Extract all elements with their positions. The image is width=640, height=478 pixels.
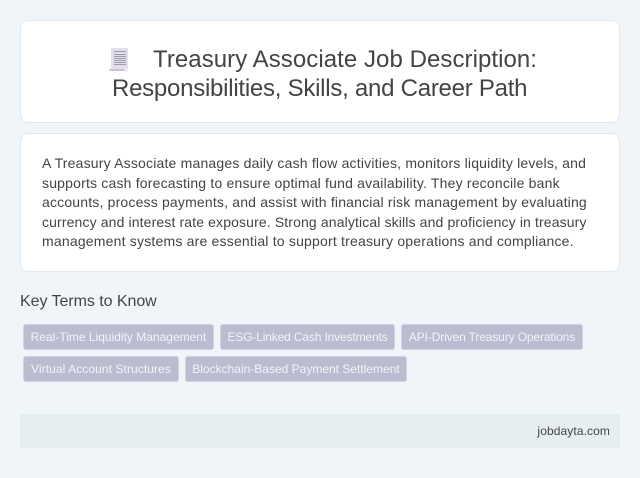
tag: real-time liquidity: Real-Time Liquidity Management bbox=[31, 330, 206, 344]
footer site name: jobdayta.com bbox=[537, 424, 610, 438]
title line 1: Treasury Associate Job Description: bbox=[153, 46, 537, 73]
title line 2: Responsibilities, Skills, and Career Path bbox=[112, 75, 527, 102]
tag: blockchain: Blockchain-Based Payment Settlement bbox=[192, 362, 400, 376]
description line 3: accounts, process payments, and assist with financial risk management by evaluating bbox=[42, 194, 587, 210]
description line 1: A Treasury Associate manages daily cash flow activities, monitors liquidity levels, and bbox=[42, 155, 586, 171]
description line 4: currency and interest rate exposure. Strong analytical skills and proficiency in treasury bbox=[42, 214, 587, 230]
heading: key terms: Key Terms to Know bbox=[20, 293, 157, 310]
footer bar bbox=[20, 414, 620, 448]
tag: virtual account bbox=[23, 356, 179, 382]
icon: receipt scroll bbox=[109, 48, 128, 72]
panel: title card bbox=[20, 20, 620, 123]
tag: blockchain bbox=[185, 356, 407, 382]
tag: ESG cash: ESG-Linked Cash Investments bbox=[227, 330, 388, 344]
tag: ESG cash bbox=[220, 324, 395, 350]
tag: virtual account: Virtual Account Structures bbox=[31, 362, 171, 376]
tag: real-time liquidity bbox=[23, 324, 214, 350]
tag: API treasury bbox=[401, 324, 583, 350]
description line 2: supports cash forecasting to ensure optimal fund availability. They reconcile bank bbox=[42, 175, 560, 191]
panel: description card bbox=[20, 133, 620, 272]
tag: API treasury: API-Driven Treasury Operations bbox=[409, 330, 575, 344]
description line 5: management systems are essential to support treasury operations and compliance. bbox=[42, 233, 574, 249]
